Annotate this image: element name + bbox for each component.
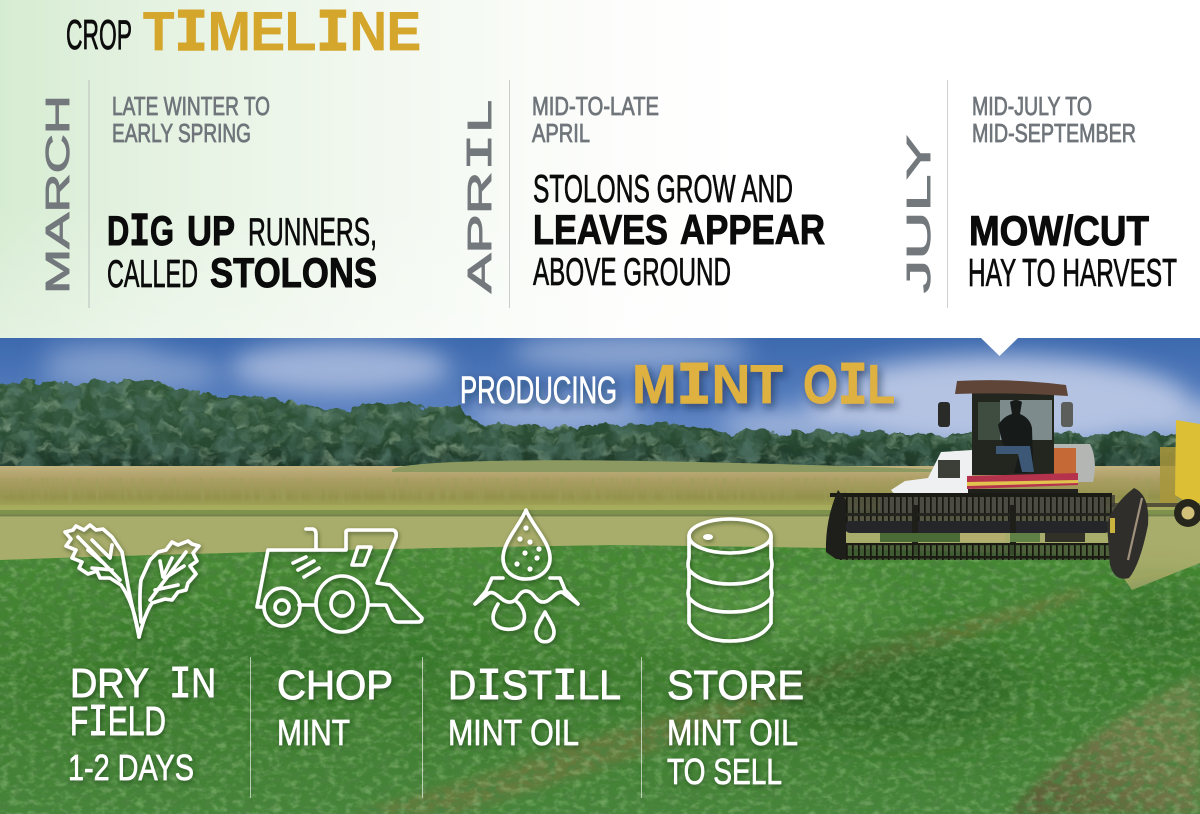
step: store mint oil: MINT OIL [667, 712, 798, 753]
date range: July: MID-SEPTEMBER [972, 118, 1136, 148]
step: chop mint: MINT [277, 712, 350, 753]
icon: chopper [257, 529, 422, 632]
heading: producing mint oil: MINT [632, 353, 783, 422]
step: dry in field: 1-2 DAYS [68, 747, 194, 788]
task: stolons grow: ABOVE GROUND [533, 251, 731, 294]
panel: April [461, 80, 825, 308]
photo: mint field with swather [0, 334, 1200, 814]
step: dry in field: DRY [70, 660, 149, 706]
field [0, 466, 1200, 518]
step: store mint oil: STORE [667, 662, 804, 708]
mown track [350, 590, 1200, 814]
step: chop mint: CHOP [277, 662, 393, 708]
date range: July [972, 91, 1136, 148]
driver [998, 400, 1033, 473]
heading: producing mint oil: OIL [803, 353, 895, 422]
task: stolons grow: APPEAR [680, 206, 825, 253]
distant meadow [392, 460, 1000, 472]
mower swather [826, 380, 1200, 579]
step: distill mint oil [448, 662, 621, 753]
task: dig up runners: DIG [107, 207, 174, 260]
icon: oil barrel [688, 519, 772, 641]
step: store mint oil [667, 662, 804, 792]
task: dig up runners [107, 207, 377, 296]
process labels [68, 657, 804, 798]
header reel [835, 495, 1115, 523]
step: chop mint [277, 662, 393, 753]
step: dry in field: FIELD [70, 698, 166, 749]
task: stolons grow [533, 168, 825, 294]
heading: producing mint oil [460, 353, 895, 422]
task: stolons grow: LEAVES [533, 206, 668, 253]
task: mow hay [968, 207, 1177, 295]
tree line [0, 378, 1176, 466]
task: dig up runners: RUNNERS, [248, 211, 377, 254]
date range: March [112, 91, 270, 148]
task: mow hay: MOW/CUT [969, 207, 1149, 254]
step: store mint oil: TO SELL [667, 751, 782, 792]
step: dry in field: IN [169, 660, 216, 711]
date range: April [532, 91, 659, 148]
heading: producing mint oil: PRODUCING [460, 370, 617, 412]
panel: July [900, 80, 1177, 308]
icon: mint leaves [65, 525, 199, 637]
step: distill mint oil: MINT OIL [448, 712, 579, 753]
step: distill mint oil: DISTILL [448, 662, 621, 713]
date range: April: MID-TO-LATE [532, 91, 659, 121]
date range: March: EARLY SPRING [112, 118, 251, 148]
task: dig up runners: UP [187, 207, 235, 254]
date range: July: MID-JULY TO [972, 91, 1092, 121]
icon: distill oil drop [475, 510, 578, 642]
month label: April: APRIL [461, 100, 502, 293]
date range: March: LATE WINTER TO [112, 91, 270, 121]
shaded grass patches [120, 585, 1200, 740]
callout pointer [981, 338, 1018, 356]
step: dry in field [68, 660, 216, 788]
title: crop timeline: TIMELINE [143, 0, 421, 69]
task: dig up runners: STOLONS [210, 249, 377, 296]
task: stolons grow: STOLONS GROW AND [533, 168, 793, 211]
month label: March: MARCH [39, 95, 76, 294]
month label: July: JULY [900, 135, 937, 293]
date range: April: APRIL [532, 118, 590, 148]
task: dig up runners: CALLED [107, 253, 198, 296]
panel: crop timeline background [0, 0, 1200, 338]
grass [0, 545, 1200, 814]
title: crop timeline: CROP [66, 11, 132, 58]
panel: March [39, 80, 377, 308]
